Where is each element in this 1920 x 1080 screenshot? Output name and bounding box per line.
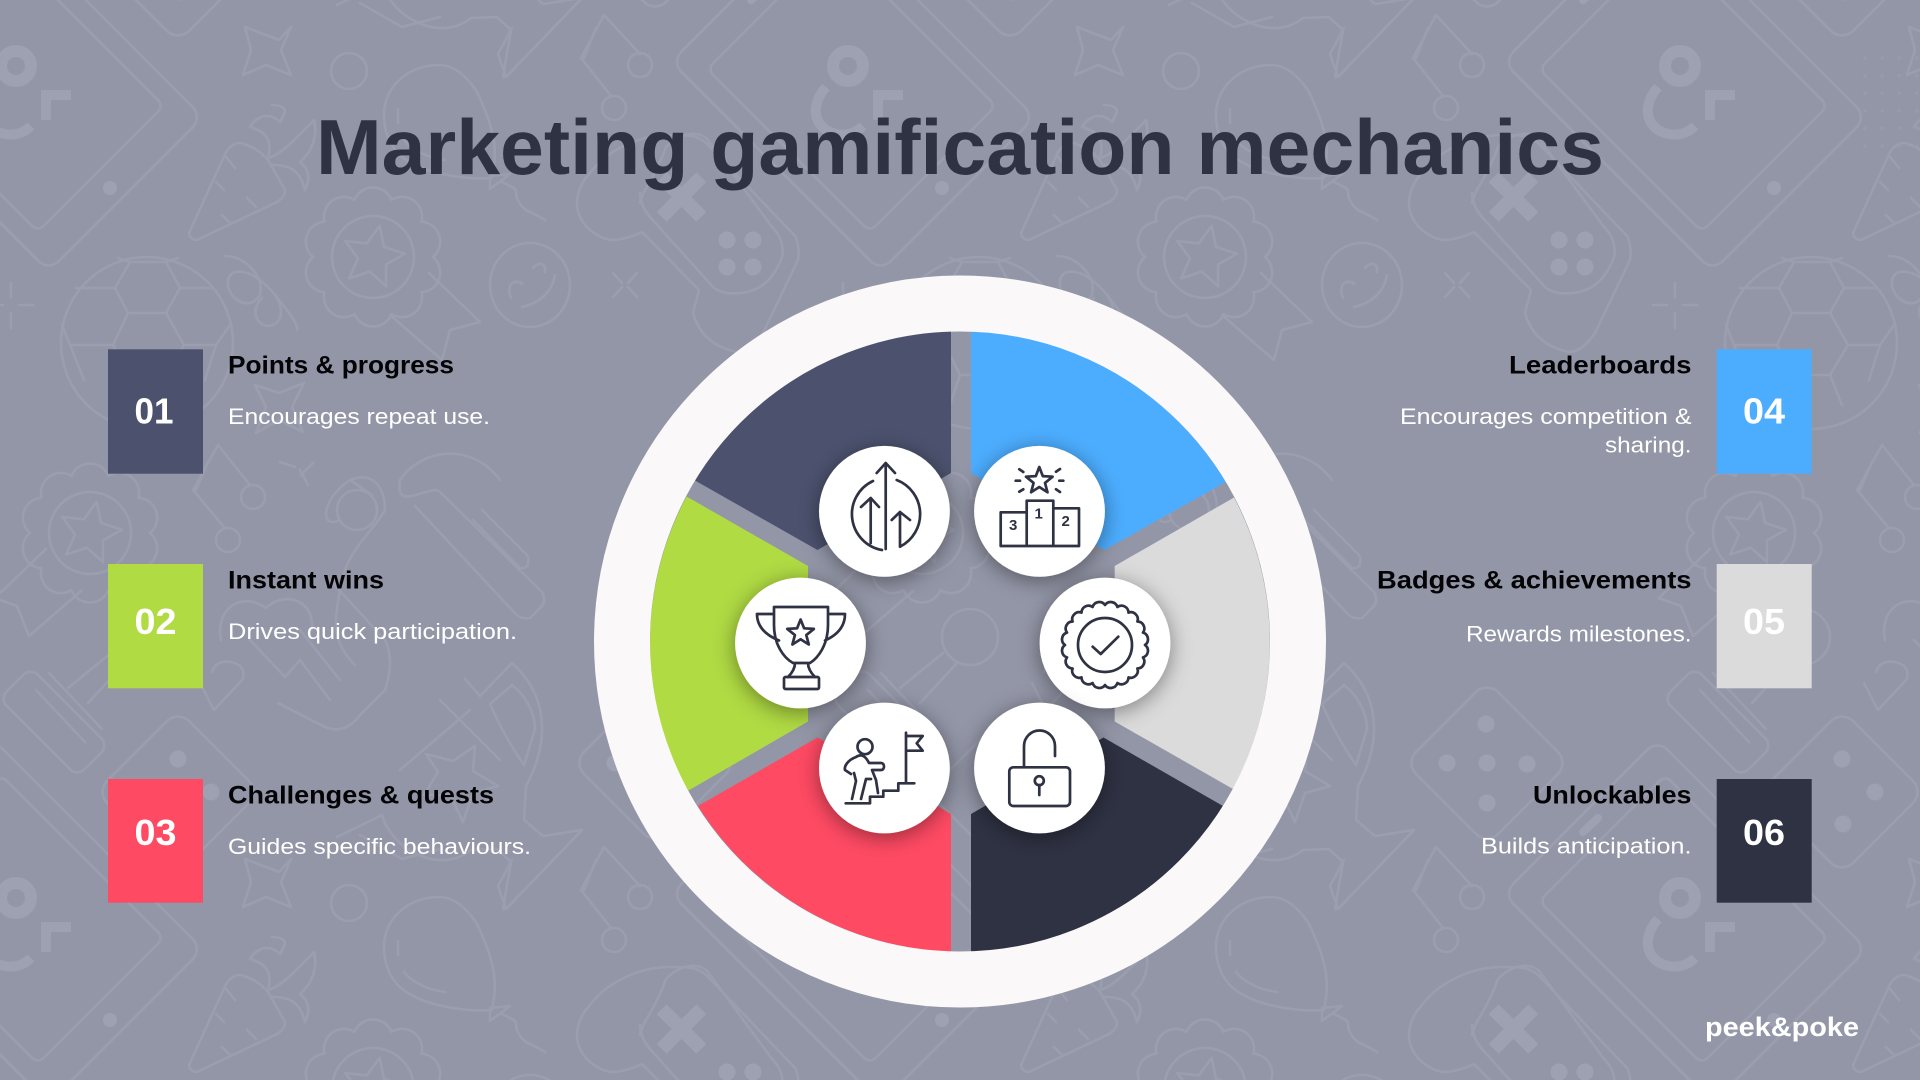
icon: podium [974, 446, 1105, 577]
icon: trophy [735, 578, 866, 708]
segment 02 [650, 496, 808, 791]
heading 05: Badges & achievements [1377, 566, 1692, 594]
number box 06: 06 [1743, 812, 1785, 853]
title: Marketing gamification mechanics [316, 103, 1604, 191]
number box 01: 01 [134, 390, 174, 431]
number box 02: 02 [134, 601, 176, 642]
panel: item 01 points and progress [108, 349, 490, 474]
icon: check badge [1040, 578, 1170, 708]
segment 04 [971, 331, 1226, 550]
description 06: Builds anticipation. [1481, 833, 1692, 858]
heading 04: Leaderboards [1509, 351, 1692, 379]
description 05: Rewards milestones. [1466, 622, 1692, 647]
description 02: Drives quick participation. [228, 619, 517, 644]
icon: podium: 3 [1009, 517, 1017, 534]
heading 01: Points & progress [228, 351, 454, 379]
panel: item 02 instant wins [108, 564, 517, 688]
number box 05: 05 [1743, 601, 1785, 642]
heading 03: Challenges & quests [228, 781, 494, 809]
icon: podium: 2 [1062, 513, 1070, 530]
number box 06 [1717, 779, 1812, 903]
segment 05 [1115, 498, 1270, 789]
segment 06 [971, 738, 1223, 952]
heading 02: Instant wins [228, 566, 384, 594]
description 03: Guides specific behaviours. [228, 834, 531, 859]
panel: item 05 badges and achievements [1377, 564, 1812, 688]
decorative dot grid [1862, 55, 1920, 151]
icon: open padlock [974, 703, 1105, 833]
panel: item 03 challenges and quests [108, 779, 531, 903]
icon: podium: 1 [1034, 506, 1043, 522]
segment 01 [695, 331, 951, 550]
number box 02 [108, 564, 203, 688]
icon: climber with flag [819, 703, 950, 833]
icon: growth arrows [819, 446, 950, 577]
panel: item 06 unlockables [1481, 779, 1812, 903]
number box 03: 03 [134, 812, 176, 853]
outer ring [622, 304, 1298, 980]
description 04: sharing. [1605, 432, 1692, 457]
wheel chart [622, 304, 1298, 980]
number box 04: 04 [1743, 390, 1785, 431]
heading 06: Unlockables [1533, 781, 1692, 809]
number box 01 [108, 349, 203, 474]
number box 04 [1717, 349, 1812, 474]
logo: peek&poke [1705, 1012, 1859, 1042]
segment 03 [698, 738, 951, 952]
number box 05 [1717, 564, 1812, 688]
number box 03 [108, 779, 203, 903]
panel: item 04 leaderboards [1400, 349, 1812, 474]
description 01: Encourages repeat use. [228, 404, 490, 429]
description 04: Encourages competition & [1400, 404, 1692, 429]
